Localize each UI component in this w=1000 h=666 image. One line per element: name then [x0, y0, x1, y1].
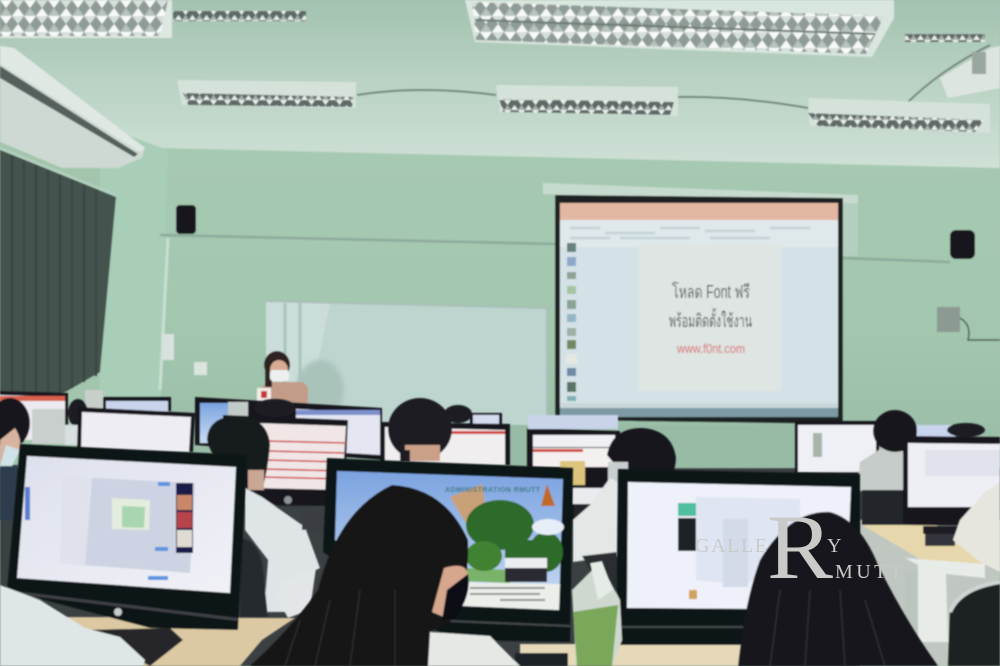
watermark GALLE: GALLE	[695, 535, 767, 557]
person seated far back	[65, 399, 88, 445]
chair back	[240, 538, 268, 617]
projected powerpoint window	[560, 203, 838, 417]
back monitor 2	[103, 397, 171, 411]
ceiling	[0, 0, 1000, 170]
slide	[638, 244, 781, 391]
chair far right	[948, 580, 1000, 666]
far right head	[947, 423, 985, 437]
hp logo	[114, 608, 122, 616]
speaker right	[950, 230, 975, 259]
student long hair centre	[250, 485, 520, 666]
front monitor right	[616, 469, 860, 645]
lower right wall and floor	[860, 520, 1000, 666]
emblem	[541, 484, 555, 506]
speaker left	[176, 205, 196, 234]
plastic cup	[572, 561, 622, 666]
keyboard left	[85, 628, 183, 666]
monitor chin line	[450, 620, 570, 627]
green bars	[122, 506, 145, 528]
wall switch	[162, 334, 174, 360]
screen housing	[543, 183, 858, 205]
light: middle centre	[496, 85, 678, 116]
web content panel	[85, 478, 195, 573]
projector screen	[555, 195, 843, 424]
person small head back	[254, 399, 296, 417]
paper stand	[32, 409, 65, 444]
wall rail	[160, 235, 950, 262]
back monitor 3	[195, 397, 382, 460]
slide heading: โหลด Font ฟรี	[672, 281, 750, 302]
file dialog	[696, 497, 800, 585]
front monitor centre	[323, 458, 573, 666]
light: top centre	[465, 0, 894, 57]
student head right centre	[607, 428, 676, 492]
whiteboard	[266, 301, 547, 440]
slide subheading: พร้อมติดตั้งใช้งาน	[669, 308, 752, 331]
monitor white row 2	[77, 407, 195, 452]
side column	[100, 125, 168, 420]
student right back	[857, 410, 917, 491]
light: middle left	[177, 80, 356, 108]
far right monitor strip	[917, 425, 955, 437]
keyboard	[515, 653, 568, 666]
screen housing side	[842, 203, 858, 256]
air conditioner	[0, 46, 145, 168]
back monitor far left	[0, 391, 68, 440]
title bar	[560, 203, 838, 220]
projector	[940, 46, 1000, 98]
person head centre	[388, 398, 452, 462]
chair dark	[862, 490, 905, 525]
back paper	[85, 390, 103, 408]
student white shirt	[245, 488, 320, 612]
thumbnail	[689, 590, 697, 599]
taskbar	[560, 408, 838, 417]
wallpaper title: ADMINISTRATION RMUTT	[445, 487, 541, 494]
building	[450, 484, 487, 530]
status bar	[560, 403, 838, 408]
back wall	[160, 148, 1000, 480]
dark monitor centre right	[527, 415, 620, 520]
wall shadow below board	[510, 425, 800, 475]
back monitor right of presenter	[470, 413, 502, 425]
green banner	[678, 503, 696, 516]
front desk right	[520, 644, 745, 666]
light: top left	[0, 0, 172, 38]
trees	[466, 500, 563, 572]
ceiling cable	[357, 45, 990, 108]
student head left	[207, 416, 270, 490]
right row monitor	[795, 421, 879, 474]
front monitor left	[6, 444, 247, 630]
watermark large R: R	[767, 496, 834, 598]
cloud	[532, 519, 564, 535]
wall socket	[937, 307, 960, 332]
context menu	[723, 519, 748, 587]
person sleeve front left	[0, 585, 145, 666]
browser panel left	[60, 476, 90, 566]
monitor with red top bar	[380, 422, 510, 465]
back row	[0, 390, 1000, 666]
social bar	[25, 487, 30, 520]
light: top strip	[173, 11, 306, 21]
presenter	[257, 351, 308, 408]
group of students on wallpaper	[505, 558, 547, 582]
campus lawn and caption	[440, 582, 560, 610]
chin line	[616, 626, 746, 628]
slide thumbnails	[566, 243, 577, 401]
front desk left	[60, 617, 295, 666]
student long hair right	[738, 512, 938, 666]
watermark: Gallery RMUTT	[695, 496, 902, 598]
keyboard and bag	[278, 512, 324, 618]
ad tower	[176, 483, 193, 553]
light: middle right	[808, 98, 990, 133]
window blinds	[0, 148, 116, 395]
watermark MUTT: MUTT	[835, 561, 902, 583]
wall cable	[960, 318, 1000, 340]
slide url: www.f0nt.com	[676, 341, 745, 356]
monitor with red lines	[223, 415, 348, 506]
far left student	[0, 398, 30, 520]
monitor far right	[903, 436, 1000, 546]
grass	[462, 568, 510, 583]
watermark Y: Y	[827, 535, 841, 557]
wall conduit	[160, 238, 168, 390]
person head behind monitor	[444, 405, 472, 423]
student white shirt right centre	[573, 478, 630, 562]
wall plate	[194, 362, 207, 375]
green chart	[112, 498, 150, 530]
front row	[0, 444, 938, 666]
desk right	[862, 522, 985, 642]
blue buttons	[148, 484, 170, 578]
ribbon	[560, 220, 838, 247]
black video tile	[678, 518, 696, 551]
lower room shadow	[0, 468, 1000, 666]
ceiling lights	[0, 0, 990, 133]
light: top right	[905, 34, 985, 42]
caption lines	[470, 588, 545, 600]
chair centre right	[582, 552, 617, 602]
student sleeve far right	[953, 482, 1000, 572]
